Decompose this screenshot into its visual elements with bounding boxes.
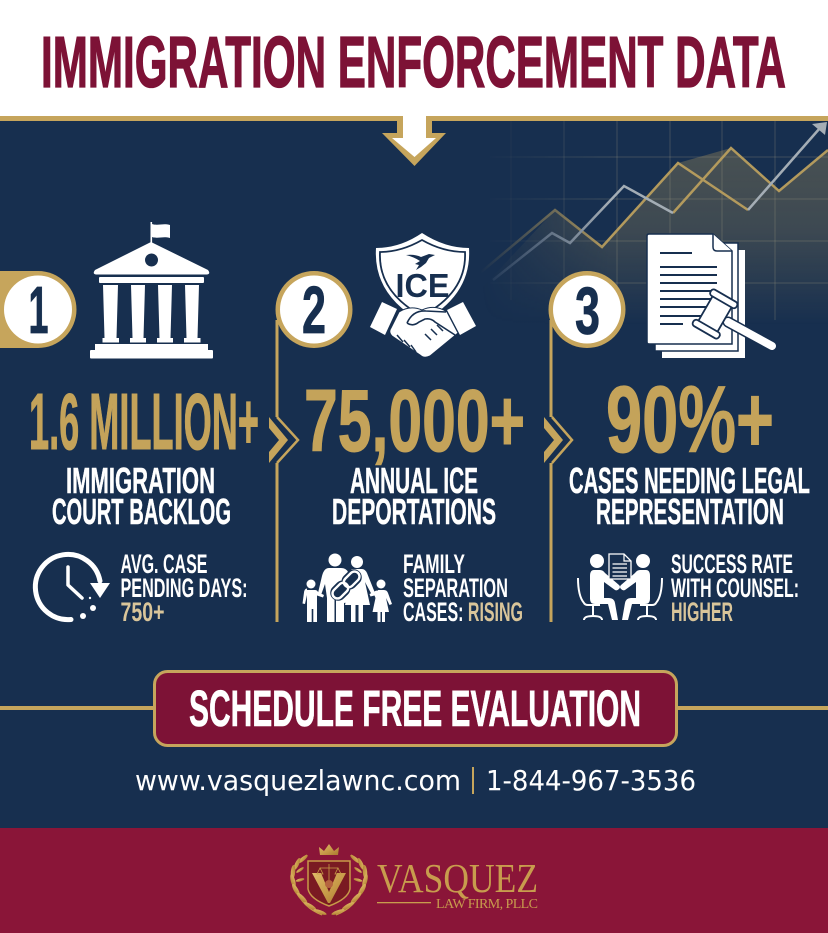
step badge 3 [548,271,626,349]
panel: legal representation [548,234,810,627]
supporting fact: family separation: SEPARATION [403,573,508,603]
infographic: 1.6 MILLION+ [29,377,259,466]
logo wordmark: VASQUEZ [377,855,538,901]
icon: separated family [302,554,392,622]
supporting fact: pending days: AVG. CASE [120,549,208,579]
supporting fact: family separation [403,549,523,627]
stat: 75,000: 75,000+ [304,371,525,470]
step badge 2 [276,271,352,348]
stat label [52,460,231,532]
supporting fact: success rate: HIGHER [671,597,733,627]
icon: client and counsel meeting [578,554,662,620]
footer band [0,828,828,933]
header down arrow [382,114,446,166]
icon: ICE shield and handshake: ICE [396,267,450,304]
supporting fact: success rate [671,549,799,627]
logo: Vasquez Law Firm [289,844,538,916]
call to action button [0,672,828,746]
contact line: www.vasquezlawnc.com [135,765,461,797]
stat label [332,460,496,532]
step badge 1: 1 [28,273,48,348]
stat label: COURT BACKLOG [52,491,231,532]
navy background panel [0,121,828,828]
stat label: IMMIGRATION [66,460,215,501]
supporting fact: pending days: 750+ [120,597,164,627]
logo rule [377,902,431,903]
icon: documents and gavel [647,234,772,358]
panel: court backlog [0,222,259,627]
icon: courthouse [90,222,213,358]
icon: clock [35,554,110,620]
logo subtitle: LAW FIRM, PLLC [436,897,538,912]
step badge 1 [0,271,76,348]
stat label: ANNUAL ICE [350,460,478,501]
step badge 3: 3 [575,274,600,349]
panel: ICE deportations [276,233,525,627]
logo emblem [289,844,369,916]
stat label: DEPORTATIONS [332,491,496,532]
contact line: 1-844-967-3536 [486,765,696,797]
connector lines and chevrons [269,320,572,622]
supporting fact: family separation: FAMILY [403,549,465,579]
icon: ICE shield and handshake [370,233,476,357]
supporting fact: pending days: PENDING DAYS: [120,573,248,603]
stat label [569,460,810,532]
supporting fact: pending days [120,549,248,627]
background trend chart [480,121,828,325]
gold header rule [0,116,828,121]
step badge 2: 2 [302,273,326,348]
contact line [135,765,696,797]
supporting fact: family separation: CASES: RISING [403,597,523,627]
